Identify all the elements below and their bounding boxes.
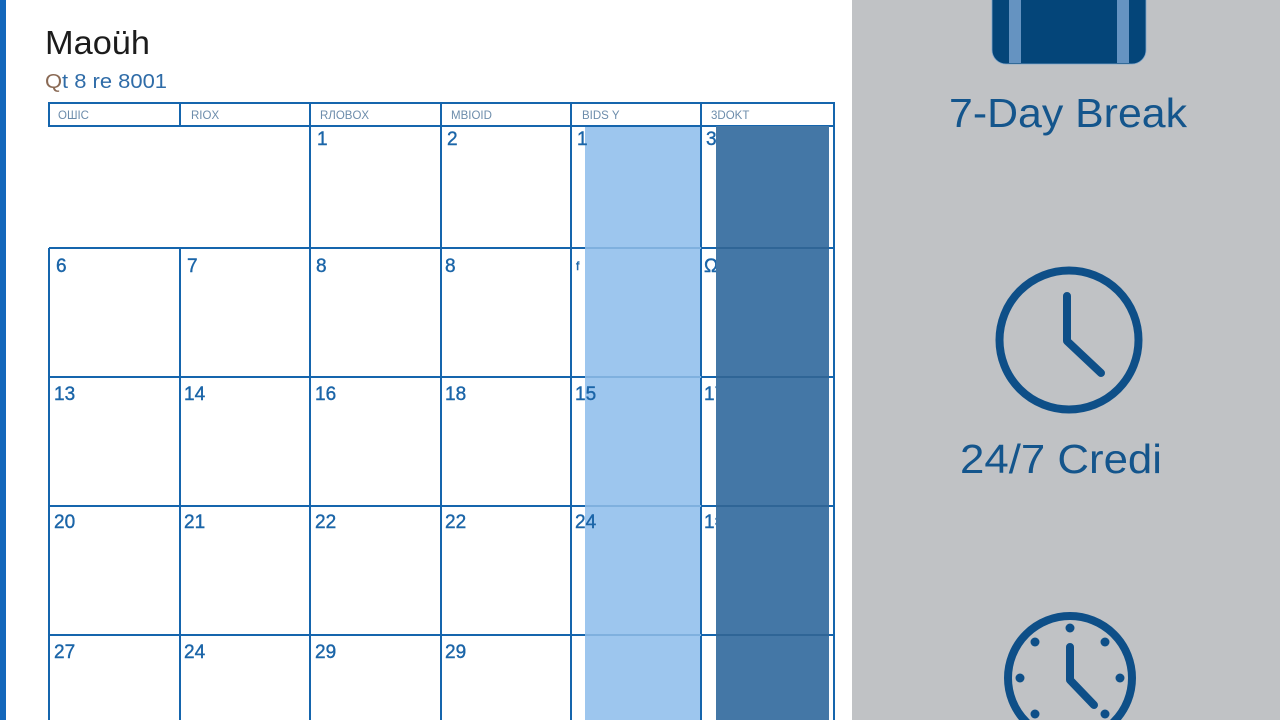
day numbers: 16 [315,384,336,405]
subtitle: Qt 8 re 8001 [45,71,167,93]
panel: right sidebar [852,0,1280,720]
day numbers: 22 [445,512,466,533]
weekday header labels: OШIC [58,110,89,122]
icon: clock [1000,270,1138,410]
weekday header labels: RЛOBOX [320,110,369,122]
weekday header labels: BIDS Y [582,110,620,122]
day numbers: 3 [706,129,717,150]
icon: clock with hour dots [1008,616,1132,720]
weekday header labels: MBIOID [451,110,492,122]
day numbers [54,129,726,663]
weekday header labels: 3DOKT [711,110,749,122]
grid lines over dark column [716,248,829,635]
label: 7-Day Break: 7-Day Break [949,90,1188,136]
day numbers: 14 [184,384,206,405]
day numbers: Ω [704,256,718,277]
day numbers: 1 [317,129,328,150]
day numbers: 27 [54,642,75,663]
day numbers: 7 [187,256,198,277]
day numbers: 6 [56,256,67,277]
day numbers: 8 [316,256,327,277]
calendar grid [49,103,834,720]
weekday header labels: RIOX [191,110,219,122]
day numbers: 24 [184,642,206,663]
light blue column [585,126,701,720]
day numbers: 1 [577,129,588,150]
title: Maoüh [45,24,150,61]
day numbers: 8 [445,256,456,277]
day numbers: 2 [447,129,458,150]
day numbers: 20 [54,512,75,533]
dark blue column [716,126,829,720]
day numbers: 24 [575,512,597,533]
day numbers: 1= [704,512,726,533]
label: 24/7 Credi: 24/7 Credi [960,436,1162,482]
grid lines over light column [585,248,701,635]
left accent bar [0,0,6,720]
weekday header labels [58,110,749,122]
day numbers: f [576,259,580,273]
day numbers: 18 [445,384,466,405]
day numbers: 21 [184,512,205,533]
day numbers: 13 [54,384,75,405]
day numbers: 29 [445,642,466,663]
icon: book [992,0,1146,64]
day numbers: 22 [315,512,336,533]
day numbers: 15 [575,384,596,405]
day numbers: 17 [704,384,725,405]
day numbers: 29 [315,642,336,663]
